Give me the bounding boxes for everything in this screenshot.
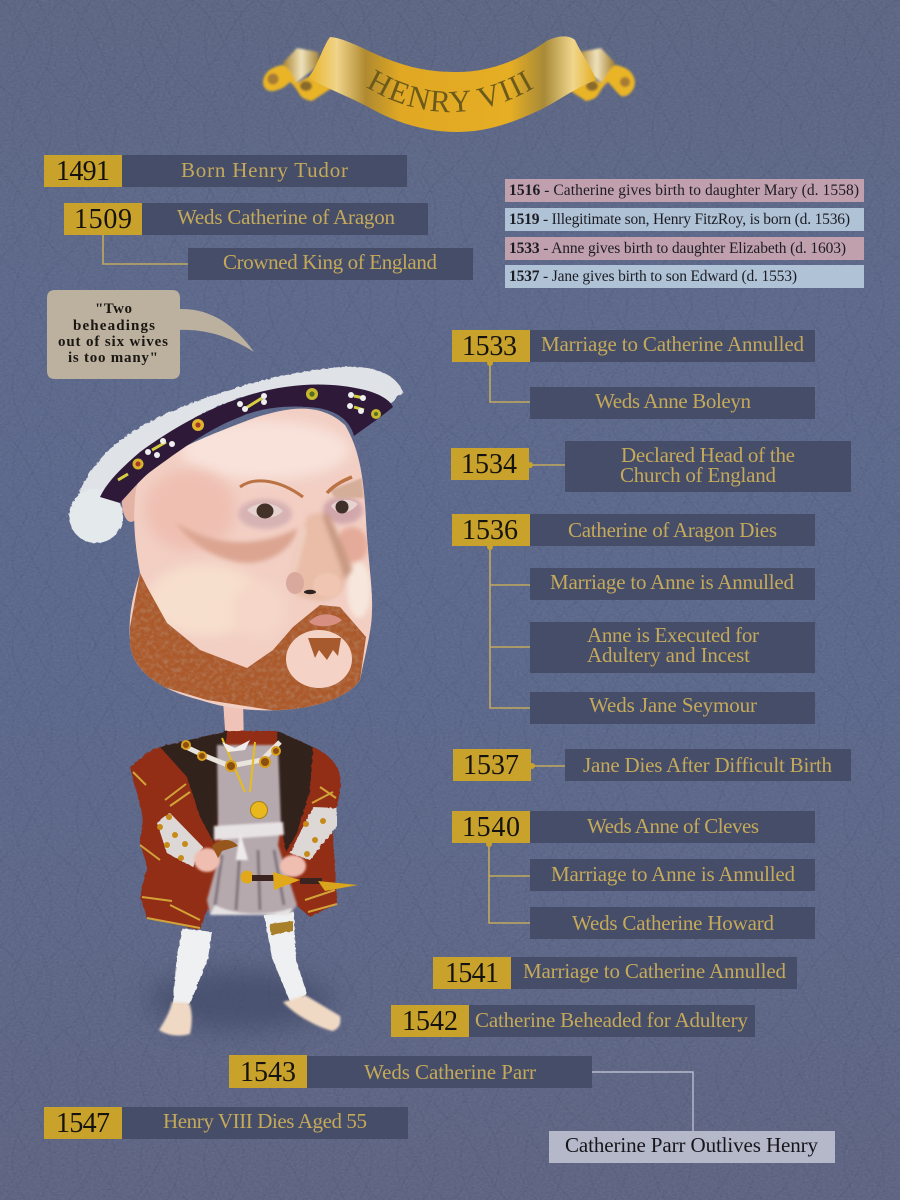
sleeve jewels	[157, 814, 326, 861]
dagger	[240, 870, 358, 891]
banner main ribbon	[308, 36, 596, 132]
execution: Adultery and Incest	[587, 643, 750, 667]
legs	[173, 912, 307, 1004]
event: 1541 annulment: Marriage to Catherine Annulled	[523, 959, 786, 983]
event: 1509 Weds Catherine of Aragon: Weds Catherine of Aragon	[177, 205, 396, 229]
lips	[309, 614, 342, 626]
tunic	[207, 745, 297, 915]
banner right curl	[566, 48, 635, 101]
event: 1543 Weds Catherine Parr	[229, 1055, 592, 1088]
wedding	[452, 811, 815, 847]
event: 1541 annulment	[433, 957, 797, 989]
hands	[194, 848, 306, 877]
beard	[130, 573, 366, 713]
event: Crowned King of England: Crowned King of England	[223, 250, 438, 274]
connector	[490, 362, 530, 402]
wedding: Weds Anne Boleyn	[595, 389, 752, 413]
soul patch	[308, 638, 341, 660]
annulment: Marriage to Anne is Annulled	[551, 862, 796, 886]
Catherine dies	[452, 514, 815, 550]
Catherine dies: 1536	[462, 515, 518, 546]
speech bubble: "Two	[95, 301, 132, 317]
annulment	[530, 859, 815, 891]
event group: 1540	[452, 811, 815, 939]
event group: 1537: Jane Dies After Difficult Birth	[583, 753, 832, 777]
event: 1491 Born Henry Tudor	[44, 155, 407, 187]
illustration: Henry VIII figure	[69, 367, 403, 1036]
ear	[122, 482, 140, 522]
birth: Mary: 1516 - Catherine gives birth to daughter Mary (d. 1558)	[509, 182, 859, 199]
connector: 1509 to coronation	[103, 235, 188, 264]
event: 1542 beheading: 1542	[402, 1006, 458, 1037]
chin	[286, 630, 352, 688]
birth: Elizabeth: 1533 - Anne gives birth to daughter Elizabeth (d. 1603)	[509, 240, 846, 257]
event group: 1534: Declared Head of the	[621, 443, 795, 467]
birth: Edward: 1537 - Jane gives birth to son Edward (d. 1553)	[509, 268, 797, 285]
wedding: 1540	[462, 812, 520, 843]
callout: Catherine Parr Outlives Henry: Catherine Parr Outlives Henry	[565, 1133, 818, 1157]
sleeves	[157, 807, 337, 867]
wedding: Weds Catherine Howard	[572, 911, 774, 935]
event: 1547 Henry dies: Henry VIII Dies Aged 55	[163, 1109, 367, 1133]
event group: 1536	[452, 514, 815, 724]
event: Crowned King of England	[188, 248, 473, 280]
annulment: Marriage to Anne is Annulled	[550, 570, 794, 594]
panel: children births	[505, 179, 864, 288]
event: 1542 beheading	[391, 1005, 755, 1037]
annulment: 1533	[462, 331, 517, 362]
speech bubble	[47, 290, 254, 379]
annulment	[452, 330, 815, 366]
event: 1509 Weds Catherine of Aragon	[64, 203, 428, 235]
robe	[130, 731, 341, 930]
connector: Parr to outcome	[592, 1072, 693, 1131]
gold chain and pendant	[182, 738, 280, 818]
robe gold trim	[133, 772, 337, 928]
nose	[290, 512, 345, 601]
Catherine dies: Catherine of Aragon Dies	[568, 518, 777, 542]
wedding	[530, 692, 815, 724]
event: 1491 Born Henry Tudor: Born Henry Tudor	[181, 158, 348, 182]
eyes	[240, 477, 358, 518]
event group: 1534: 1534	[461, 449, 517, 480]
event: 1543 Weds Catherine Parr: Weds Catherine Parr	[364, 1060, 536, 1084]
annulment: Marriage to Catherine Annulled	[541, 332, 804, 356]
event group: 1533	[452, 330, 815, 419]
birth: Elizabeth	[505, 237, 864, 260]
title banner	[262, 36, 636, 132]
callout: Catherine Parr Outlives Henry	[549, 1131, 835, 1163]
hat fur brim	[69, 367, 403, 543]
banner left curl	[263, 48, 332, 101]
cheek shade	[175, 522, 298, 563]
shoes	[159, 995, 341, 1036]
wedding: Weds Anne of Cleves	[587, 814, 759, 838]
neck	[223, 700, 244, 745]
event group: 1534	[451, 441, 851, 492]
birth: Edward	[505, 265, 864, 288]
hat band	[100, 384, 393, 503]
collar	[222, 740, 250, 752]
wedding	[530, 387, 815, 419]
wedding: Weds Jane Seymour	[589, 693, 757, 717]
hat jewels	[118, 388, 381, 480]
event group: 1537	[453, 749, 851, 781]
speech bubble: beheadings	[73, 318, 155, 334]
event: 1509 Weds Catherine of Aragon: 1509	[74, 204, 132, 235]
head	[69, 367, 403, 720]
event: 1542 beheading: Catherine Beheaded for Adultery	[475, 1008, 748, 1032]
event: 1491 Born Henry Tudor: 1491	[56, 156, 110, 187]
execution	[530, 622, 815, 673]
ground shadow	[148, 970, 332, 1030]
event: 1543 Weds Catherine Parr: 1543	[240, 1057, 296, 1088]
speech bubble: is too many"	[68, 350, 158, 366]
speech bubble: out of six wives	[58, 334, 168, 350]
dagger hilt in left hand	[212, 840, 238, 858]
annulment	[530, 568, 815, 600]
event: 1547 Henry dies: 1547	[56, 1108, 110, 1139]
event group: 1534: Church of England	[620, 463, 776, 487]
eye sockets	[238, 499, 292, 529]
event: 1541 annulment: 1541	[445, 958, 499, 989]
execution: Anne is Executed for	[587, 623, 759, 647]
connector	[490, 546, 530, 708]
face	[130, 408, 372, 710]
birth: Henry FitzRoy: 1519 - Illegitimate son, Henry FitzRoy, is born (d. 1536)	[509, 211, 850, 228]
event: 1547 Henry dies	[44, 1107, 408, 1139]
event group: 1537: 1537	[463, 750, 519, 781]
banner title: HENRY VIII	[366, 70, 534, 112]
wedding	[530, 907, 815, 939]
connector	[489, 843, 530, 923]
